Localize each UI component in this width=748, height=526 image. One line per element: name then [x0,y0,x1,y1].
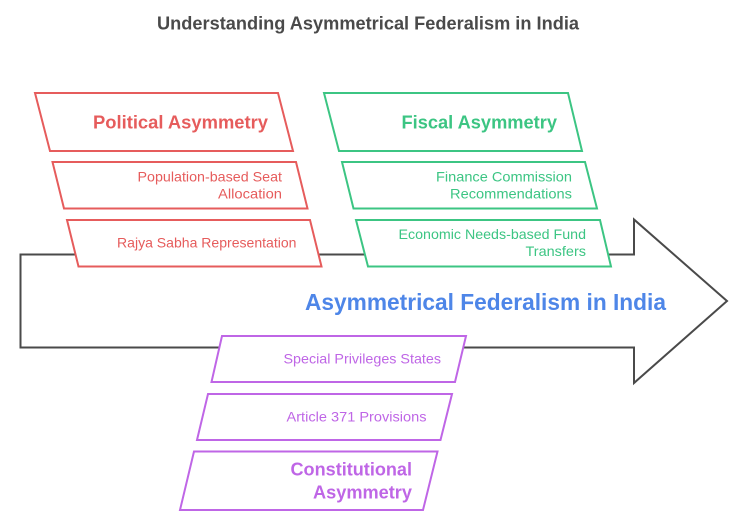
title: Understanding Asymmetrical Federalism in India [157,14,580,34]
heading: political asymmetry [35,93,293,151]
item: economic needs-based fund transfers: Transfers [526,243,586,259]
item: population-based seat allocation: Population-based Seat [138,168,282,184]
central arrow [20,220,727,383]
item: special privileges states [212,336,466,382]
item: economic needs-based fund transfers [356,220,611,266]
heading: political asymmetry: Political Asymmetry [93,112,268,132]
item: population-based seat allocation [52,162,308,208]
panel: fiscal asymmetry [324,93,611,266]
item: finance commission recommendations [342,162,597,208]
item: rajya sabha representation: Rajya Sabha Representation [117,234,296,250]
heading: fiscal asymmetry: Fiscal Asymmetry [402,112,557,132]
item: rajya sabha representation [67,220,322,266]
heading: constitutional asymmetry: Asymmetry [313,482,412,502]
arrow label: Asymmetrical Federalism in India [305,289,666,315]
heading: fiscal asymmetry [324,93,582,151]
item: population-based seat allocation: Allocation [218,186,282,202]
item: finance commission recommendations: Finance Commission [436,168,572,184]
heading: constitutional asymmetry: Constitutional [290,460,412,480]
item: economic needs-based fund transfers: Economic Needs-based Fund [398,226,586,242]
item: finance commission recommendations: Recommendations [450,186,572,202]
item: special privileges states: Special Privileges States [284,350,441,366]
item: article 371 provisions: Article 371 Provisions [286,408,426,424]
item: article 371 provisions [197,394,452,440]
panel: constitutional asymmetry [180,336,466,510]
heading: constitutional asymmetry [180,452,438,510]
panel: political asymmetry [35,93,322,266]
